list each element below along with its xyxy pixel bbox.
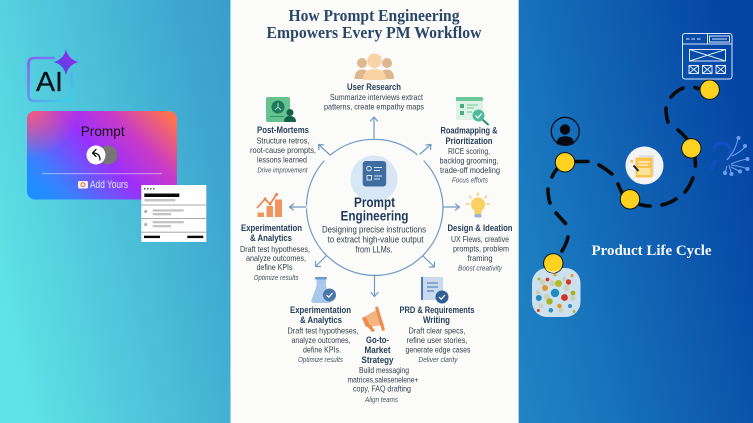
item: Experimentation & Analytics left: Experimentation (241, 223, 302, 233)
hub text: Designing precise instructions (322, 225, 426, 235)
item: Experimentation & Analytics left: analyze outcomes, (246, 253, 306, 263)
hub text: to extract high-value output (328, 235, 424, 245)
item: Experimentation & Analytics left: Draft test hypotheses, (240, 244, 310, 254)
label: Product Life Cycle: Product Life Cycle (592, 243, 712, 259)
item: PRD & Requirements Writing: Deliver clarity (418, 357, 458, 364)
item: Roadmapping & Prioritization: backlog grooming, (440, 156, 498, 166)
icon: roadmap with magnifier (456, 97, 488, 124)
item: Go-to-Market Strategy: Market (364, 345, 391, 355)
item: Design & Ideation: Boost creativity (458, 266, 502, 272)
item: Go-to-Market Strategy: copy, FAQ drafting (353, 384, 411, 394)
panel: product life cycle (532, 34, 750, 317)
item: Roadmapping & Prioritization: Focus efforts (452, 178, 488, 184)
item: Design & Ideation: UX Flews, creative (451, 234, 509, 244)
item: User Research (324, 53, 424, 112)
item: Design & Ideation: Design & Ideation (448, 223, 512, 233)
icon: coloured network blob (532, 268, 580, 317)
item: User Research: Summarize interviews extract (330, 92, 424, 102)
icon: hub checklist (350, 156, 398, 202)
item: Experimentation & Analytics bottom: Optimize results (298, 357, 343, 364)
item: Experimentation & Analytics left (240, 193, 310, 282)
icon: yellow document badge (626, 146, 664, 184)
item: Design & Ideation (448, 193, 512, 272)
icon: document with check (421, 277, 448, 304)
item: Experimentation & Analytics left: define KPIs (256, 262, 292, 272)
item: Go-to-Market Strategy: Build messaging (359, 365, 409, 375)
item: Experimentation & Analytics bottom: & Analytics (300, 315, 342, 325)
item: Post-Mortems: Drive improvement (258, 168, 308, 174)
card: Prompt add yours sticker (27, 111, 177, 200)
item: Experimentation & Analytics bottom: Experimentation (290, 305, 351, 315)
item: PRD & Requirements Writing: refine user stories, (406, 335, 468, 345)
icon: users (354, 53, 394, 80)
milestone dots (544, 80, 719, 273)
hub text: Prompt (354, 195, 395, 210)
item: Experimentation & Analytics bottom: analyze outcomes, (292, 335, 350, 345)
panel: prompt engineering infographic (230, 0, 519, 423)
item: Go-to-Market Strategy: Strategy (362, 355, 394, 365)
item: User Research: User Research (347, 82, 401, 92)
card: Prompt add yours sticker: Prompt (81, 123, 125, 139)
icon: lightbulb (466, 193, 490, 218)
item: Roadmapping & Prioritization (440, 97, 500, 184)
item: Go-to-Market Strategy (348, 306, 419, 404)
item: Go-to-Market Strategy: Go-to- (366, 335, 389, 345)
item: PRD & Requirements Writing: Writing (423, 315, 450, 325)
item: Experimentation & Analytics bottom (288, 277, 358, 364)
title (266, 6, 482, 42)
item: Experimentation & Analytics bottom: Draft test hypotheses, (288, 326, 358, 336)
item: Post-Mortems: root-cause prompts, (250, 145, 316, 155)
hub circle with arrows (290, 117, 460, 296)
hub text: from LLMs. (356, 245, 392, 255)
icon: megaphone (362, 306, 385, 332)
item: PRD & Requirements Writing: generate edge cases (406, 344, 470, 354)
icon: AI badge with sparkle (28, 50, 78, 101)
item: Design & Ideation: framing (468, 253, 493, 263)
icon: magnifier with neural tree (712, 136, 750, 176)
panel: left prompt visuals (27, 50, 206, 242)
icon: user avatar (551, 117, 579, 146)
item: PRD & Requirements Writing: Draft clear specs, (408, 326, 466, 336)
icon: orange chart (257, 193, 282, 217)
item: Roadmapping & Prioritization: trade-off modeling (440, 165, 500, 175)
icon: AI badge with sparkle: AI (36, 66, 63, 97)
item: Post-Mortems: Post-Mortems (257, 125, 309, 135)
item: Experimentation & Analytics left: & Analytics (250, 233, 292, 243)
item: Go-to-Market Strategy: Align teams (364, 397, 398, 404)
item: Experimentation & Analytics bottom: define KPIs. (303, 344, 341, 354)
item: PRD & Requirements Writing (400, 277, 475, 364)
item: Roadmapping & Prioritization: Roadmapping & (440, 126, 498, 136)
hub text: Engineering (340, 208, 408, 224)
card: Prompt add yours sticker: Add Yours (90, 179, 128, 191)
card: wireframe document (141, 185, 206, 242)
item: Post-Mortems (250, 97, 316, 174)
item: Roadmapping & Prioritization: Prioritization (446, 136, 492, 146)
item: Roadmapping & Prioritization: RICE scoring, (448, 146, 490, 156)
item: Experimentation & Analytics left: Optimize results (254, 275, 299, 282)
title: Empowers Every PM Workflow (266, 23, 482, 42)
icon: flask with check (311, 277, 336, 303)
item: Go-to-Market Strategy: matrices,salesenelene+ (348, 375, 419, 385)
item: Design & Ideation: prompts, problem (453, 244, 509, 254)
icon: wireframe window (682, 34, 732, 79)
icon: green report with person (266, 97, 296, 122)
item: Post-Mortems: lessons learned (257, 154, 307, 164)
hub text (322, 195, 426, 255)
dashed journey path (548, 88, 698, 251)
item: PRD & Requirements Writing: PRD & Requirements (400, 305, 475, 315)
title: How Prompt Engineering (288, 6, 460, 25)
item: User Research: patterns, create empathy maps (324, 102, 424, 112)
item: Post-Mortems: Structure retros, (256, 136, 310, 146)
